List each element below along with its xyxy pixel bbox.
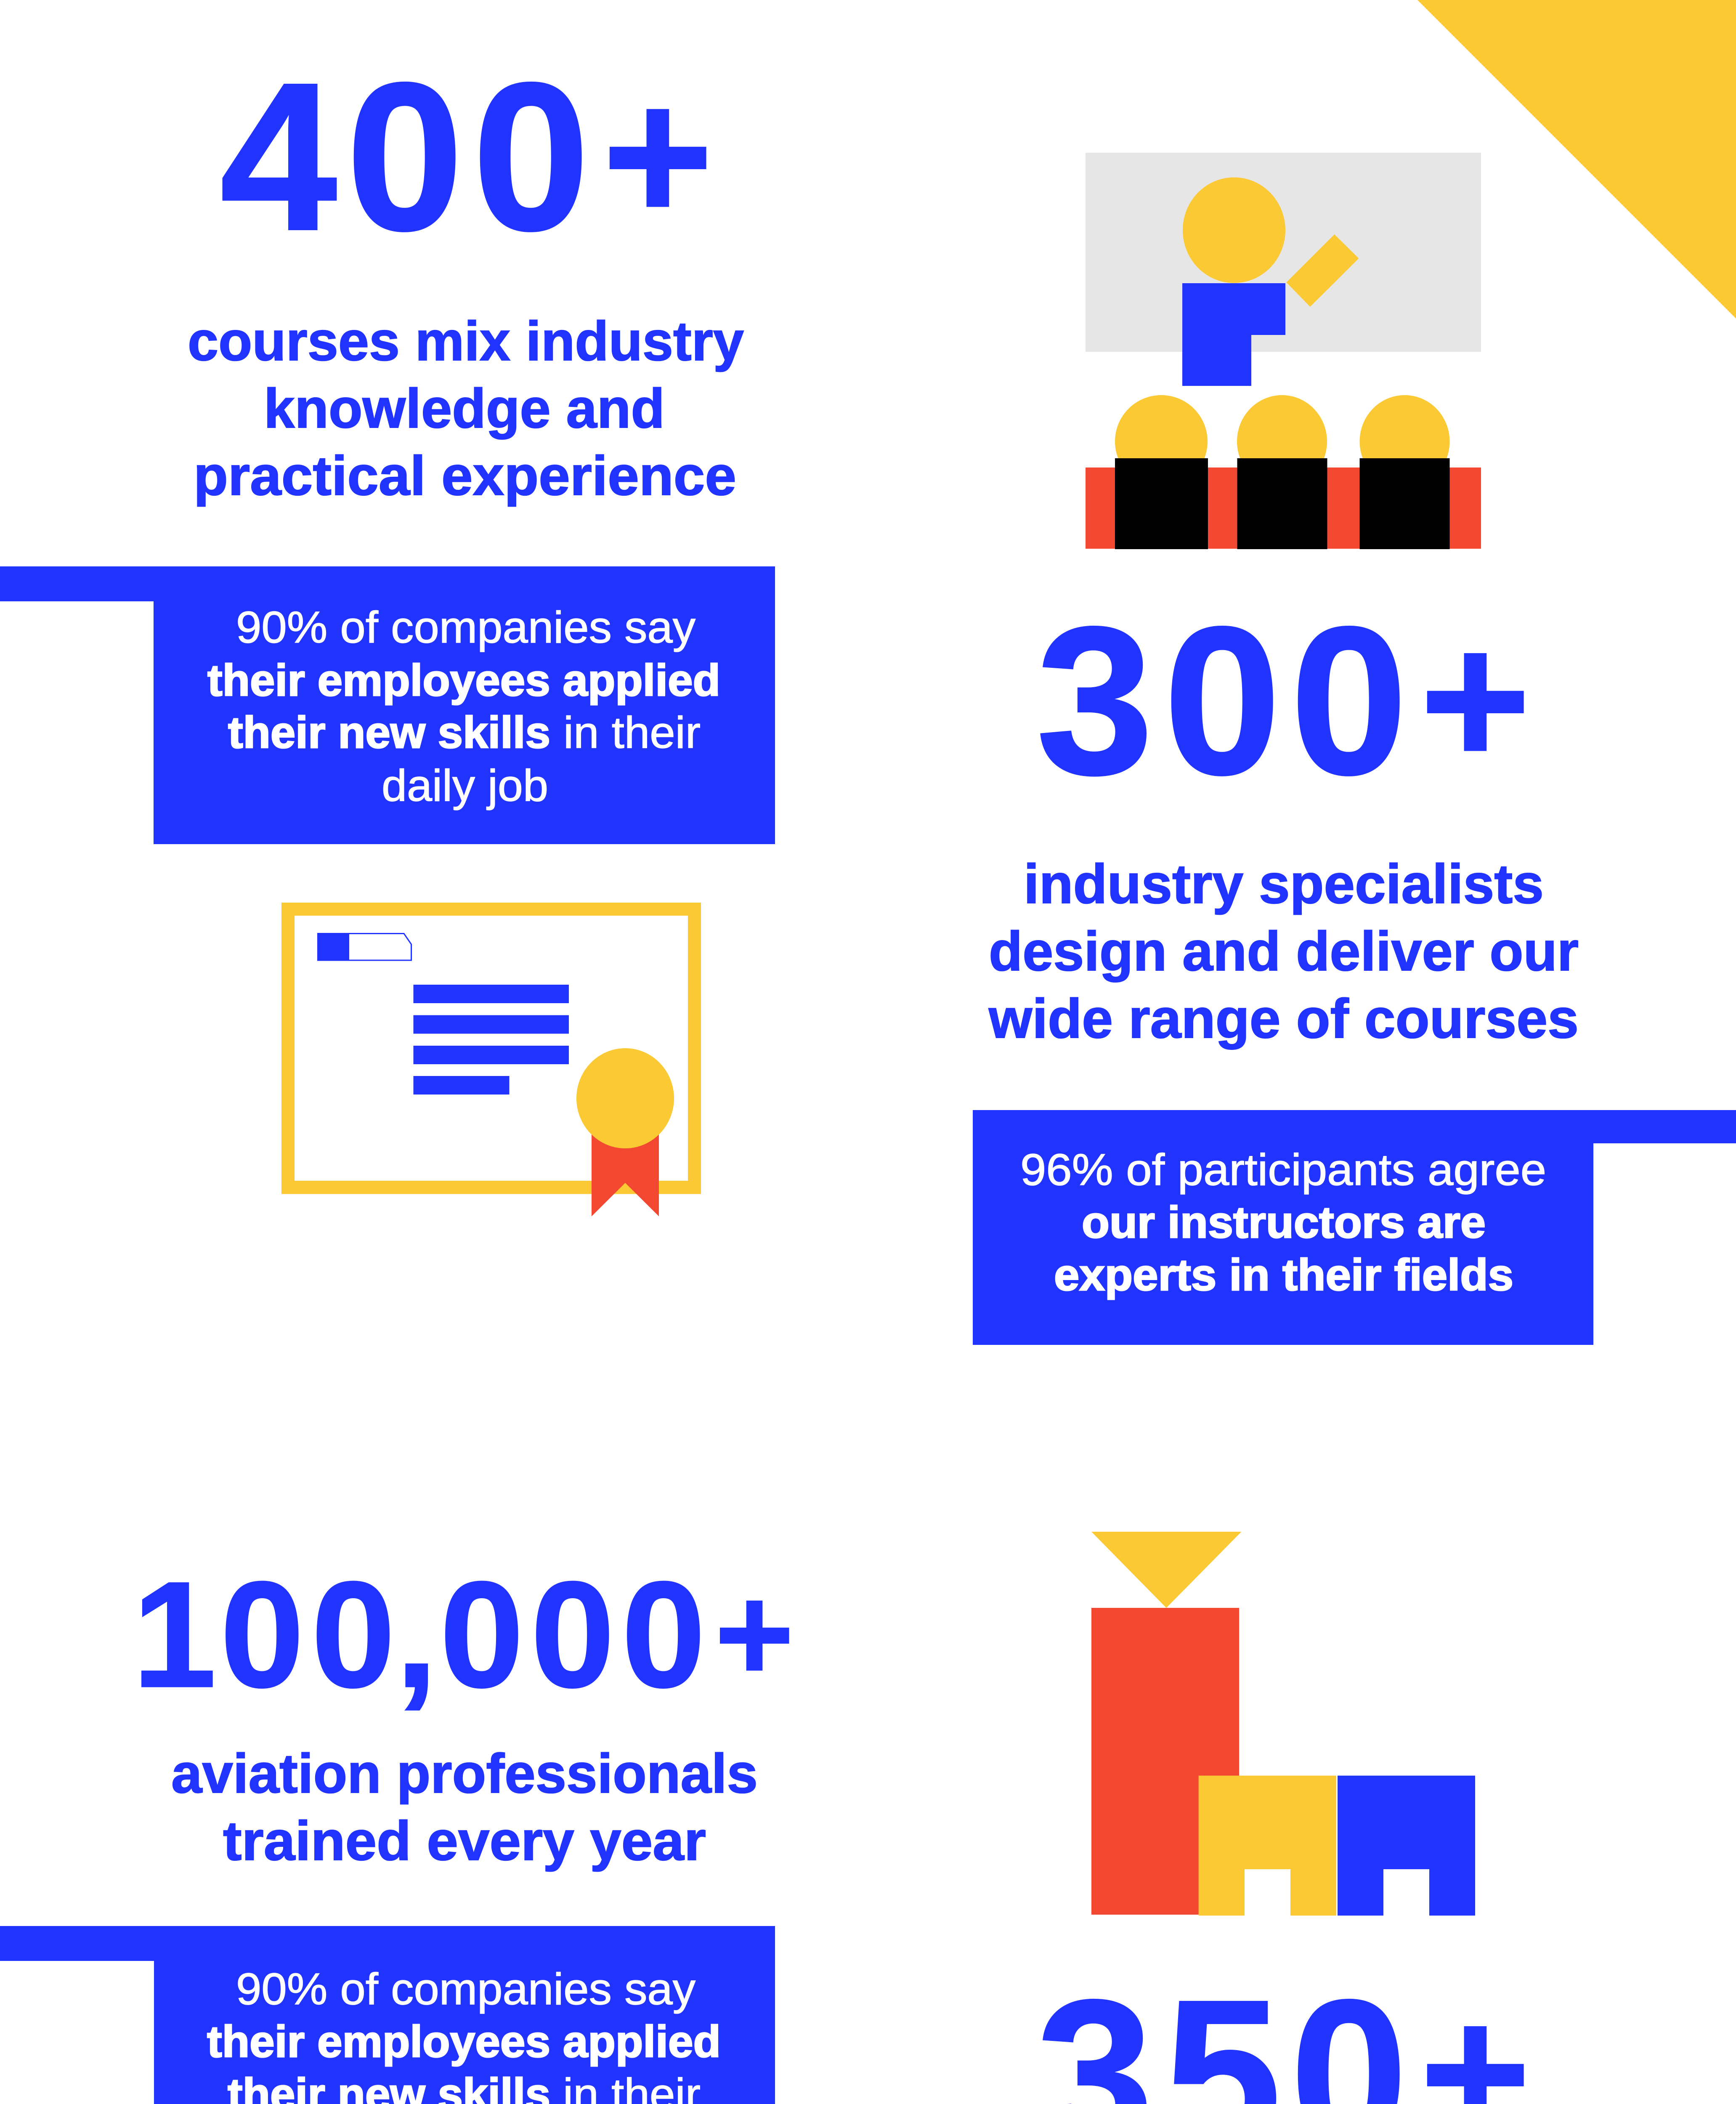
stat description: courses: courses mix industry [188, 310, 744, 372]
callout panel: 90% of companies, second: their employees applied [207, 2017, 721, 2067]
section: 300+ specialists [973, 583, 1736, 1345]
stat description: specialists: industry specialists [1024, 853, 1544, 915]
icon: instructor and audience [1086, 153, 1481, 549]
stat number: 100,000+: 100,000 [133, 1550, 706, 1719]
stat number: 300+: 300 [1036, 583, 1407, 818]
corner triangle: top right [1417, 0, 1736, 319]
stat description: professionals: aviation professionals [171, 1743, 758, 1804]
callout panel: 96% of participants: experts in their fields [1054, 1250, 1513, 1300]
section: 400+ courses [0, 39, 775, 844]
callout panel: 90% of companies: their employees applied [207, 656, 720, 705]
stat description: courses: practical experience [194, 445, 736, 507]
callout panel: 90% of companies, second: 90% of companies say [236, 1964, 695, 2014]
callout panel: 90% of companies, second [0, 1926, 775, 2104]
callout panel: 90% of companies: in their [563, 708, 701, 757]
section: 350+ solutions [973, 1956, 1736, 2104]
stat description: specialists [988, 853, 1579, 1049]
stat description: courses: knowledge and [264, 377, 665, 439]
callout panel: 90% of companies: 90% of companies say [236, 603, 695, 652]
callout panel: 96% of participants: 96% of participants agree [1020, 1145, 1546, 1195]
stat number: 400+: 400 [220, 39, 589, 274]
stat description: courses [188, 310, 744, 507]
callout panel: 96% of participants: our instructors are [1082, 1198, 1486, 1247]
section: 100,000+ professionals [0, 1550, 794, 2104]
stat description: specialists: design and deliver our [989, 920, 1579, 982]
callout panel: 90% of companies: their new skills [228, 708, 550, 757]
callout panel: 96% of participants [973, 1110, 1736, 1345]
callout panel: 90% of companies [0, 566, 775, 844]
stat description: professionals [171, 1743, 758, 1872]
stat number: 100,000+: + [715, 1559, 794, 1710]
stat description: professionals: trained every year [223, 1810, 706, 1872]
stat number: 400+: + [603, 50, 713, 261]
icon: certificate [281, 903, 701, 1216]
icon: city buildings [1091, 1532, 1475, 1915]
stat number: 300+: + [1420, 594, 1531, 805]
stat description: specialists: wide range of courses [988, 988, 1579, 1049]
callout panel: 90% of companies: daily job [382, 761, 548, 810]
